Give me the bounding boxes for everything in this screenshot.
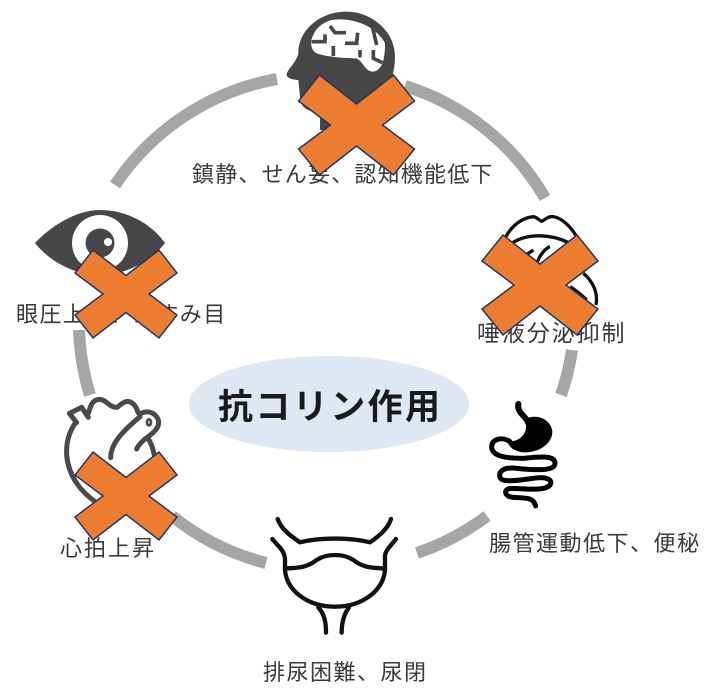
icon: mouth: [505, 217, 597, 305]
label: raised intraocular pressure, blurred vision: 眼圧上昇、かすみ目: [16, 302, 227, 327]
icon: heart: [67, 399, 159, 503]
icon: eye: [35, 210, 165, 275]
label: urinary difficulty and retention: 排尿困難、尿閉: [263, 660, 428, 685]
icon: stomach and intestine: [492, 404, 555, 506]
cross mark: mouth: [482, 235, 598, 335]
centre ellipse with title: [189, 356, 469, 452]
ring: grey arc segments: [79, 79, 572, 563]
icon: bladder: [272, 519, 396, 633]
cross mark: brain: [298, 75, 414, 175]
label: raised heart rate: 心拍上昇: [60, 536, 156, 561]
cross mark: eye: [75, 250, 177, 338]
cross mark: heart: [75, 452, 177, 540]
centre ellipse with title: 抗コリン作用: [218, 388, 442, 427]
label: salivation suppression: 唾液分泌抑制: [477, 320, 626, 346]
label: sedation, delirium, cognitive decline: 鎮静、せん妄、認知機能低下: [192, 162, 494, 187]
icon: head with brain: [287, 12, 395, 130]
label: reduced bowel motility, constipation: 腸管運動低下、便秘: [489, 531, 701, 556]
